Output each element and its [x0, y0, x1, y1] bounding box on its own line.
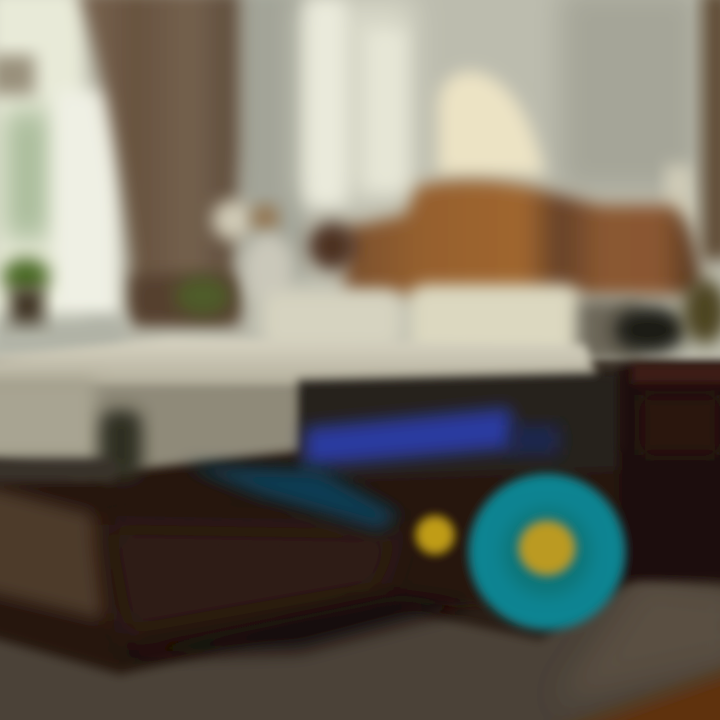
mattress top [0, 338, 600, 398]
plant by curtain [175, 276, 231, 316]
window light on wall [300, 0, 693, 220]
badge yellow center [519, 521, 575, 575]
wall [0, 0, 720, 360]
pillows [262, 285, 640, 362]
bedside lamp shadow [614, 280, 720, 354]
headboard [308, 180, 702, 295]
teal circle badge [469, 474, 625, 630]
left window [0, 0, 120, 340]
mattress side [0, 378, 305, 482]
blue layer highlight [305, 408, 560, 466]
flowers [212, 200, 294, 302]
bed base [0, 450, 640, 670]
yellow dot [416, 516, 454, 554]
mattress dark layer [298, 372, 620, 480]
floor [0, 578, 720, 720]
nightstand [620, 362, 720, 580]
plant on sill [0, 258, 125, 355]
curtain [78, 0, 240, 325]
teal band [185, 465, 400, 530]
right wall edge [702, 0, 720, 260]
